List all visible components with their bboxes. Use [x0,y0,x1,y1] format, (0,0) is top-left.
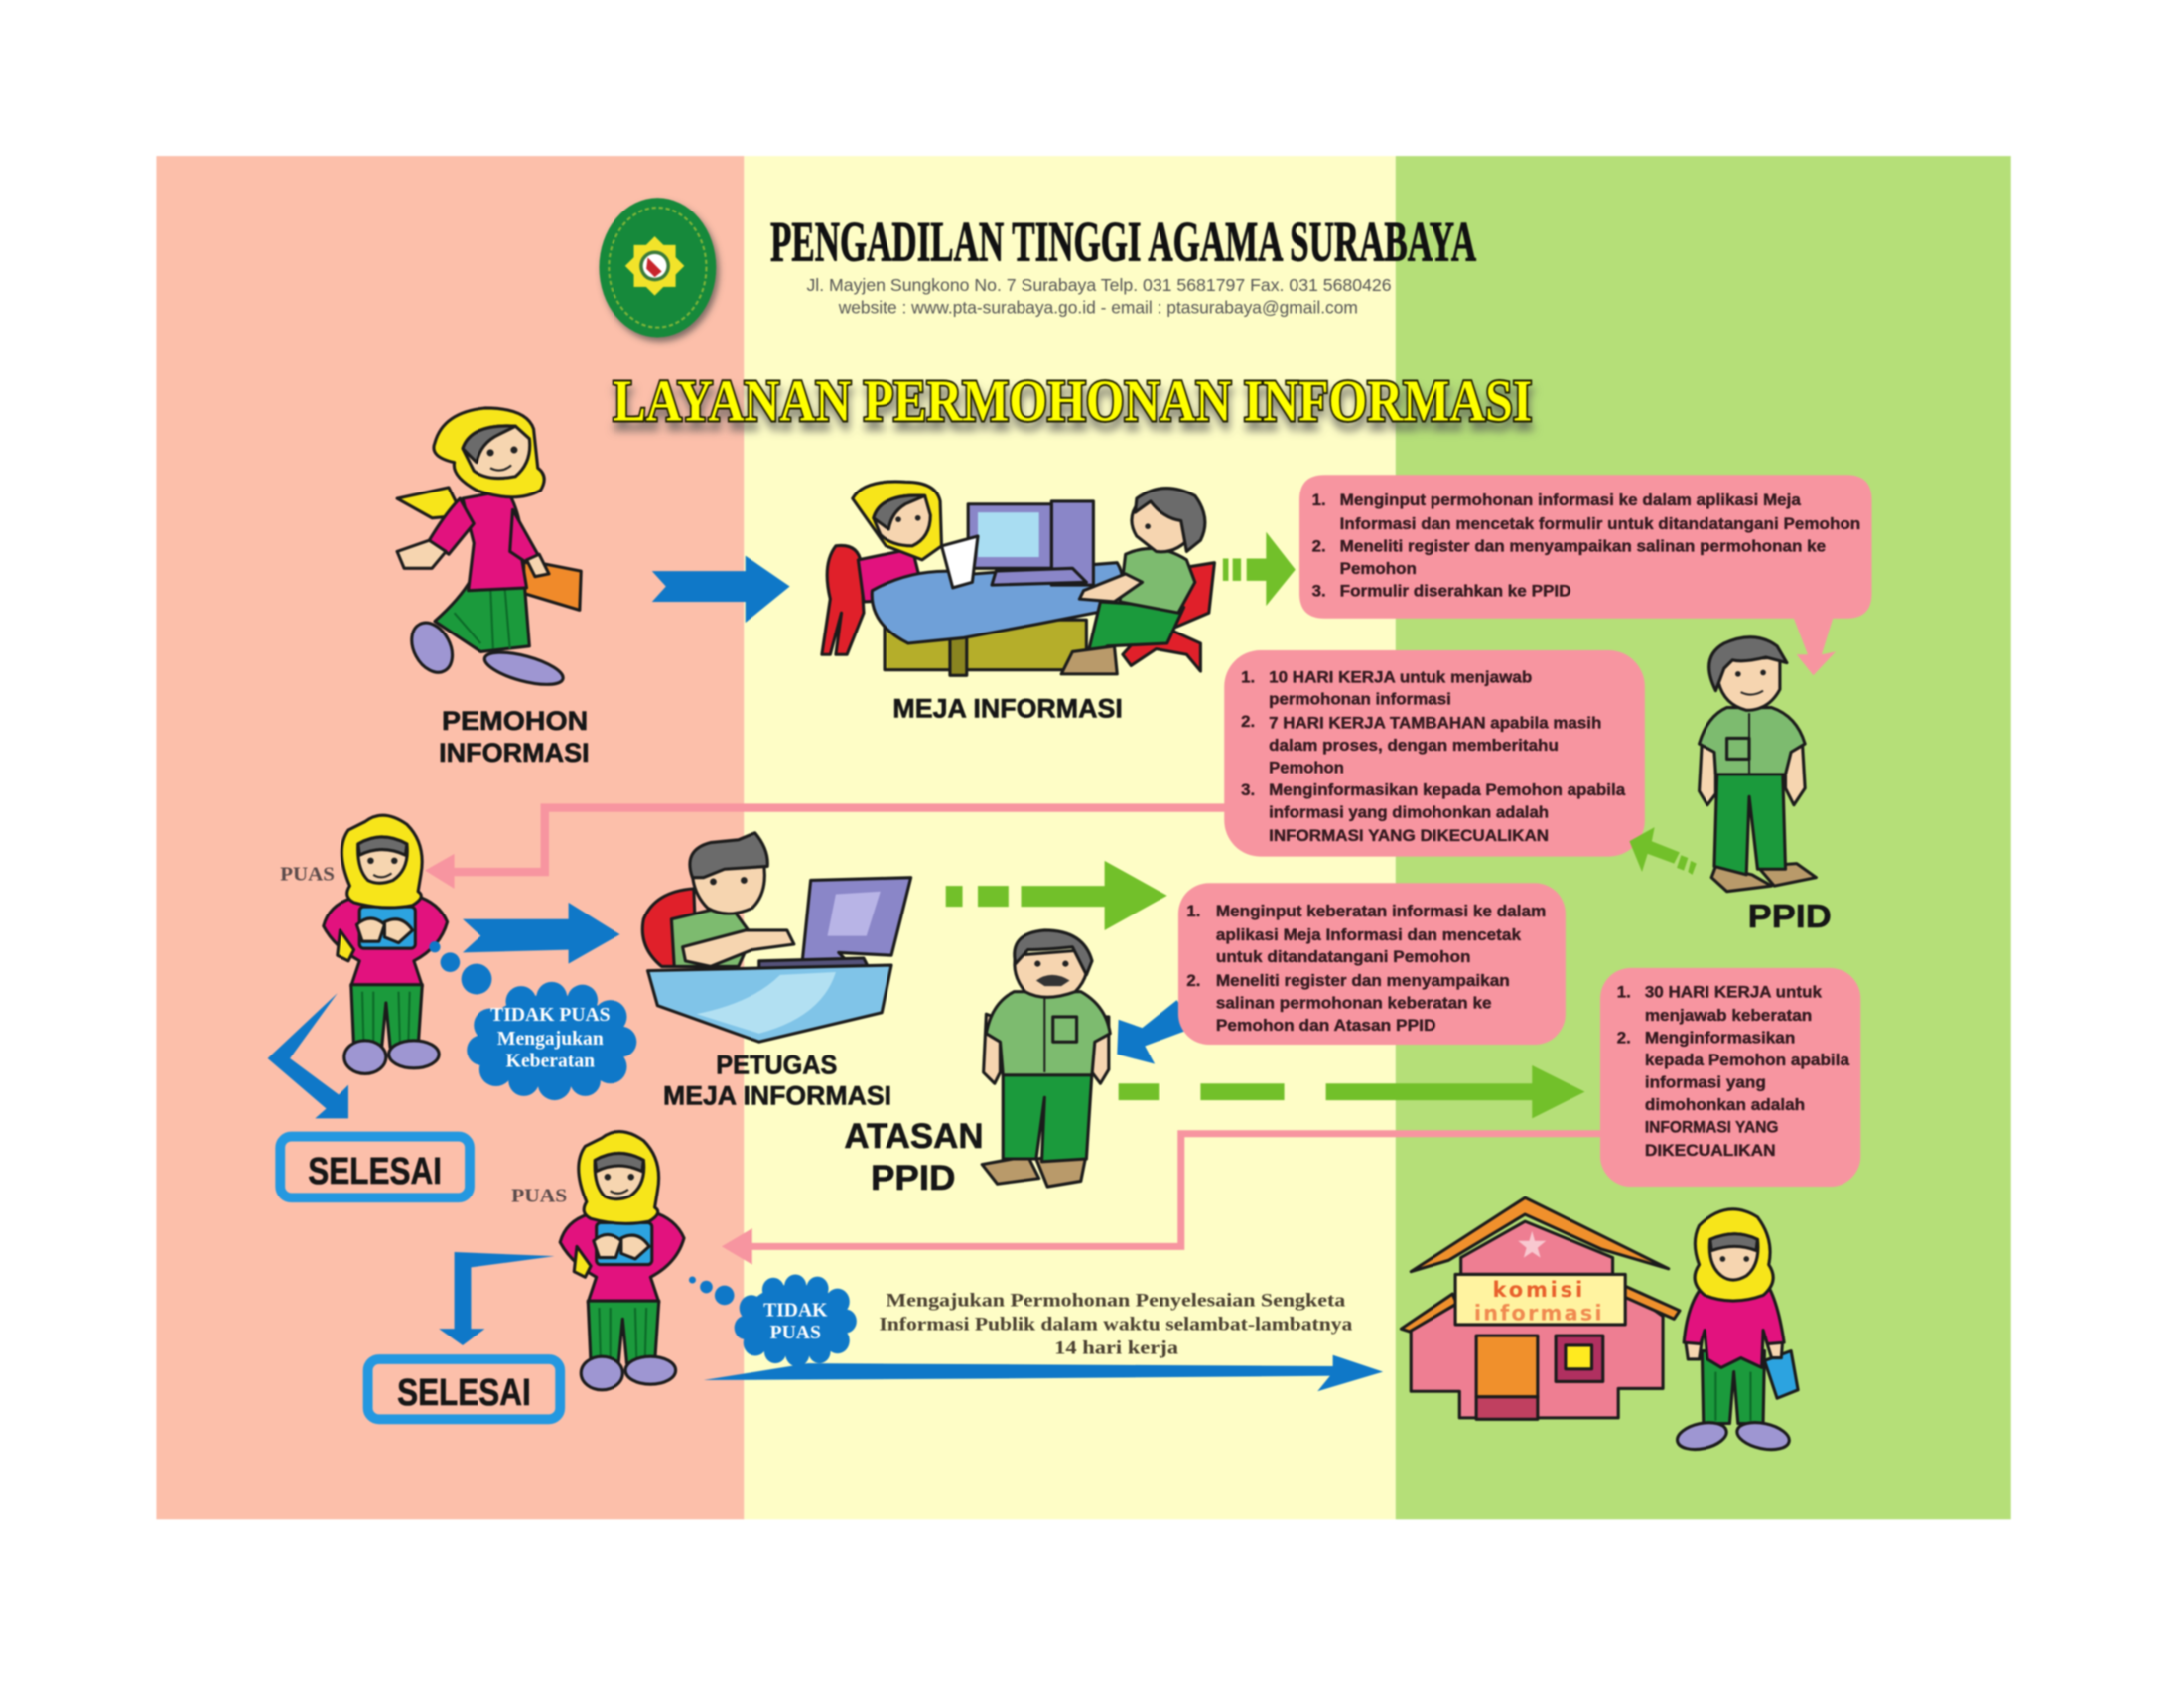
callout: atasan response: 30 HARI KERJA untuk [1645,982,1823,1001]
callout: tidak puas cloud [467,982,636,1100]
thought dots 2 [689,1277,735,1305]
figure: meja informasi scene [822,482,1214,675]
callout: atasan response: dimohonkan adalah [1645,1095,1805,1114]
callout: ppid response times: 10 HARI KERJA untuk menjawab [1269,667,1532,686]
arrow: dashed green to callout 4 [1119,1065,1585,1118]
arrow: pink return to puas woman 2 [722,1134,1601,1265]
arrow: pemohon to meja informasi [652,556,790,623]
label: petugas meja informasi [663,1050,891,1110]
callout: ppid response times: dalam proses, dengan memberitahu [1269,736,1559,755]
heading: institution name: PENGADILAN TINGGI AGAMA SURABAYA [770,211,1476,273]
arrow: blue to petugas [463,903,620,964]
icon: komisi informasi house [1401,1197,1680,1419]
callout: ppid response times: Menginformasikan kepada Pemohon apabila [1269,780,1626,799]
arrow: green ppid to callout 2 [1629,827,1697,875]
callout: meja informasi duties: Formulir diserahkan ke PPID [1340,581,1571,600]
callout: meja informasi duties: Pemohon [1340,559,1417,578]
callout: keberatan duties: Pemohon dan Atasan PPID [1216,1016,1435,1035]
label: pemohon informasi: PEMOHON [442,706,588,736]
callout: ppid response times: INFORMASI YANG DIKECUALIKAN [1269,826,1549,845]
callout: meja informasi duties [1299,475,1871,675]
label: meja informasi: MEJA INFORMASI [892,693,1123,723]
callout: keberatan duties: untuk ditandatangani Pemohon [1216,947,1471,966]
callout: atasan response: 1. [1617,982,1631,1001]
callout: ppid response times: 2. [1241,712,1255,731]
figure: atasan ppid man [982,930,1110,1187]
callout: ppid response times [1224,650,1645,857]
thought dots 1 [429,941,491,994]
callout: atasan response: kepada Pemohon apabila [1645,1051,1850,1069]
label: petugas meja informasi: MEJA INFORMASI [663,1080,891,1110]
box: selesai 1 [280,1137,470,1197]
callout: keberatan duties: 1. [1186,902,1200,920]
callout: ppid response times: informasi yang dimohonkan adalah [1269,802,1549,821]
label: pemohon informasi: INFORMASI [439,738,590,768]
figure: puas woman 2 [560,1132,684,1390]
icon: court logo [599,198,716,337]
arrow: dashed green to callout 3 [946,861,1167,930]
text: sengketa instructions: 14 hari kerja [1054,1337,1179,1358]
callout: keberatan duties: Menginput keberatan informasi ke dalam [1216,902,1546,920]
title: LAYANAN PERMOHONAN INFORMASI [613,369,1532,434]
callout: atasan response: INFORMASI YANG [1645,1117,1779,1136]
callout: ppid response times: 3. [1241,780,1255,799]
box: selesai 2: SELESAI [397,1372,531,1414]
callout: tidak puas cloud 2: PUAS [770,1323,821,1343]
callout: ppid response times: 1. [1241,667,1255,686]
arrow: blue to selesai 2 [439,1252,555,1345]
callout: meja informasi duties: Meneliti register dan menyampaikan salinan permohonan ke [1340,536,1826,555]
arrow: blue callout 3 to atasan [1117,1000,1193,1064]
callout: atasan response: informasi yang [1645,1072,1766,1091]
text: website and email: website : www.pta-surabaya.go.id - email : ptasurabaya@gmail.com [838,298,1358,318]
text: sengketa instructions [879,1291,1353,1358]
callout: atasan response: Menginformasikan [1645,1029,1795,1048]
figure: woman with blue folder [1675,1209,1798,1454]
arrow: dashed green to callout 1 [1223,532,1296,606]
label: ppid: PPID [1748,899,1832,935]
panel: outcome column [1396,156,2011,1519]
figure: pemohon walking woman [397,408,581,691]
callout: tidak puas cloud: Keberatan [506,1051,595,1071]
arrow: long blue to komisi informasi [704,1355,1383,1391]
text: puas 1: PUAS [280,864,335,885]
callout: atasan response: menjawab keberatan [1645,1006,1812,1025]
callout: meja informasi duties: 1. [1312,491,1326,509]
label: pemohon informasi [439,706,590,768]
panel: process column [744,156,1396,1519]
callout: tidak puas cloud: TIDAK PUAS [490,1005,611,1026]
callout: tidak puas cloud 2 [735,1274,857,1366]
callout: keberatan duties [1178,883,1566,1045]
callout: tidak puas cloud: Mengajukan [497,1029,604,1050]
figure: ppid man [1700,637,1816,892]
label: atasan ppid: PPID [871,1159,956,1197]
figure: puas woman 1 [324,815,448,1073]
callout: keberatan duties: Meneliti register dan menyampaikan [1216,971,1510,990]
callout: meja informasi duties: Menginput permohonan informasi ke dalam aplikasi Meja [1340,491,1802,509]
label: atasan ppid: ATASAN [844,1117,984,1156]
callout: atasan response [1600,968,1860,1187]
text: puas 2: PUAS [511,1186,567,1206]
callout: ppid response times: permohonan informasi [1269,690,1451,709]
callout: meja informasi duties: 3. [1312,581,1326,600]
callout: atasan response: DIKECUALIKAN [1645,1141,1776,1160]
panel: pemohon column [156,156,744,1519]
text: sengketa instructions: Informasi Publik dalam waktu selambat-lambatnya [879,1315,1353,1336]
callout: keberatan duties: aplikasi Meja Informasi dan mencetak [1216,925,1522,944]
icon: komisi informasi house: informasi [1474,1301,1604,1326]
text: address: Jl. Mayjen Sungkono No. 7 Surabaya Telp. 031 5681797 Fax. 031 5680426 [806,275,1392,295]
callout: tidak puas cloud 2: TIDAK [763,1300,828,1321]
callout: keberatan duties: salinan permohonan keberatan ke [1216,994,1492,1013]
icon: komisi informasi house: komisi [1492,1277,1585,1302]
box: selesai 1: SELESAI [308,1151,442,1193]
label: petugas meja informasi: PETUGAS [716,1050,837,1079]
callout: atasan response: 2. [1617,1029,1631,1048]
arrow: pink return to puas woman [425,808,1226,889]
callout: meja informasi duties: Informasi dan mencetak formulir untuk ditandatangani Pemohon [1340,514,1860,533]
box: selesai 2 [368,1359,560,1419]
callout: meja informasi duties: 2. [1312,536,1326,555]
arrow: blue to selesai 1 [268,993,348,1118]
figure: petugas meja informasi scene [642,833,911,1042]
text: sengketa instructions: Mengajukan Permohonan Penyelesaian Sengketa [886,1291,1346,1312]
label: atasan ppid [844,1117,984,1197]
callout: ppid response times: 7 HARI KERJA TAMBAHAN apabila masih [1269,714,1601,733]
callout: ppid response times: Pemohon [1269,758,1344,776]
callout: keberatan duties: 2. [1186,971,1200,990]
